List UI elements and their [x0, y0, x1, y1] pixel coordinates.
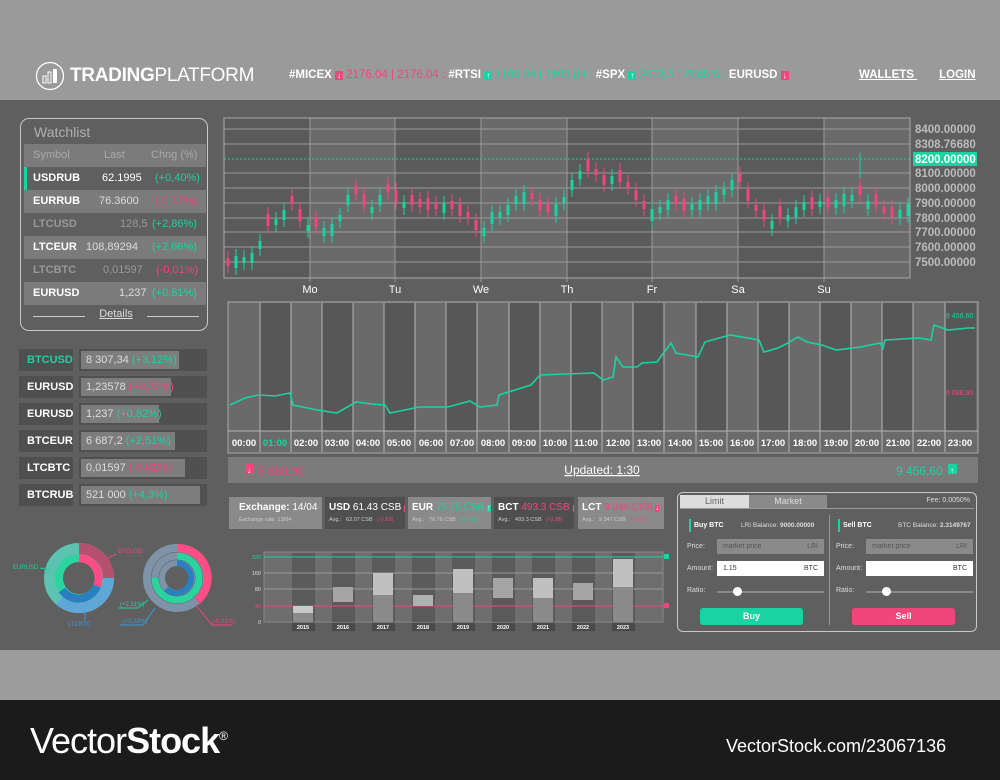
BCT box: [494, 497, 574, 529]
summary bar: 9 456,60: [896, 464, 943, 478]
donut left: BTCUSD: [118, 549, 143, 555]
row EURUSD: EURUSD: [33, 287, 79, 299]
row LTCEUR: (+2,66%): [152, 241, 197, 253]
hour labels: 22:00: [917, 438, 941, 449]
sell column: Ratio:: [836, 587, 854, 594]
candlestick chart: [224, 118, 977, 296]
row LTCUSD: LTCUSD: [33, 218, 77, 230]
ticker EURUSD: 1,23578 (+0,32%): [86, 381, 174, 393]
day labels: Mo: [302, 284, 318, 296]
panel: order form: Market: [774, 496, 802, 506]
price axis: 8308.76680: [915, 139, 976, 151]
row EURUSD: [24, 282, 206, 305]
hour labels: 03:00: [325, 438, 349, 449]
hour labels: 17:00: [761, 438, 785, 449]
sell column: Sell BTC: [843, 522, 872, 529]
ticker BTCUSD: [19, 349, 207, 371]
ticker BTCUSD: 8 307,34 (+3,12%): [86, 354, 177, 366]
watermark bar: VectorStock.com/23067136: [726, 736, 946, 756]
day labels: We: [473, 284, 489, 296]
day labels: Sa: [731, 284, 746, 296]
sell column: market price: [872, 543, 911, 550]
bar chart: 2017: [377, 625, 389, 631]
ticker BTCEUR: 6 687,2 (+2,51%): [86, 435, 171, 447]
row EURUSD: (+0,81%): [152, 287, 197, 299]
row LTCEUR: 108,89294: [86, 241, 138, 253]
candles: [228, 152, 908, 275]
ticker BTCUSD: BTCUSD: [27, 354, 73, 366]
hour labels: 23:00: [948, 438, 972, 449]
day labels: Fr: [647, 284, 658, 296]
bar chart: 2023: [617, 625, 629, 631]
tabs: Limit: [705, 496, 724, 506]
sell column: Price:: [836, 543, 854, 550]
bar chart: 2022: [577, 625, 589, 631]
hour labels: 20:00: [855, 438, 879, 449]
price axis: 7800.00000: [915, 213, 976, 225]
buy column: Buy: [743, 611, 760, 621]
bar chart: 160: [252, 571, 261, 577]
ticker LTCBTC: 0,01597 (-0,01%): [86, 462, 171, 474]
exchange date box: Exchange rate: 13/04: [239, 517, 291, 523]
price axis: 7700.00000: [915, 227, 976, 239]
ticker list: [19, 349, 207, 506]
price axis: 8100.00000: [915, 168, 976, 180]
sell column: Amount:: [836, 565, 862, 572]
day labels: Th: [561, 284, 573, 296]
panel: order form: Fee: 0.0050%: [926, 497, 970, 504]
EUR box: EUR 75.75 CSB ↑: [412, 502, 491, 513]
hour labels: 06:00: [419, 438, 443, 449]
row LTCUSD: (+2,86%): [152, 218, 197, 230]
row LTCUSD: 128,5: [120, 218, 148, 230]
summary bar: ↑: [950, 466, 954, 475]
row LTCBTC: 0,01597: [103, 264, 143, 276]
tabs: [680, 495, 749, 508]
summary bar: ↓: [247, 466, 251, 475]
buy column: 1.15: [723, 565, 737, 572]
bars: [293, 559, 633, 622]
donut left: [13, 549, 143, 628]
buy column: LRI: [807, 543, 818, 550]
watchlist header row: Chng (%): [151, 149, 197, 161]
bar chart: 2020: [497, 625, 509, 631]
buy column: Buy BTC: [694, 522, 724, 529]
sell column: [836, 519, 973, 625]
watermark bar: [0, 700, 1000, 780]
row EURRUB: EURRUB: [33, 195, 80, 207]
watermark bar: VectorStock®: [30, 720, 227, 761]
row USDRUB: (+0,40%): [155, 172, 200, 184]
bar chart: 80: [255, 587, 261, 593]
ticker LTCBTC: LTCBTC: [27, 462, 70, 474]
hour labels: 10:00: [543, 438, 567, 449]
hour labels: 00:00: [232, 438, 256, 449]
header bar: [0, 0, 1000, 100]
line chart: 6 688,90: [946, 390, 973, 397]
BCT box: BCT 493.3 CSB ↓: [498, 502, 574, 513]
USD box: Avg.: 62.07 CSB (-0.63): [329, 517, 393, 523]
line chart: 9 456,60: [946, 313, 973, 320]
watchlist header row: Last: [104, 149, 125, 161]
ticker EURUSD 2: EURUSD: [27, 408, 73, 420]
buy column: market price: [723, 543, 762, 550]
panel: order form: [677, 492, 977, 632]
ticker EURUSD 2: 1,237 (+0,82%): [86, 408, 162, 420]
hour labels: 15:00: [699, 438, 723, 449]
brand text: TRADINGPLATFORM: [70, 65, 254, 86]
bar chart: 0: [258, 620, 261, 626]
bar chart: 2019: [457, 625, 469, 631]
bar chart: [252, 552, 669, 631]
ticker tape: #MICEX ↓ 2176.04 | 2176.04 : #RTSI ↑ 1105.84 | 1105.84 : #SPX ↑ 2665.5 | 2665.5 : EURUSD ↓: [289, 69, 787, 81]
buy column: BTC: [804, 565, 818, 572]
watchlist header row: Symbol: [33, 149, 70, 161]
donut right: (+2.51%): [120, 602, 145, 608]
LCT box: Avg.: 9.347 CSB (-0.17): [582, 517, 646, 523]
buy column: Price:: [687, 543, 705, 550]
USD box: [325, 497, 405, 529]
donut left: EURUSD: [13, 565, 39, 571]
ticker BTCRUB: [19, 484, 207, 506]
row EURRUB: [24, 190, 206, 213]
row LTCUSD: [33, 218, 197, 230]
ticker BTCRUB: BTCRUB: [27, 489, 73, 501]
hour labels: [232, 438, 972, 449]
day labels: [302, 284, 831, 296]
EUR box: Avg.: 76.76 CSB (+1.01): [412, 517, 478, 523]
price axis: [913, 124, 977, 269]
row EURRUB: 76.3600: [99, 195, 139, 207]
bar chart: 2015: [297, 625, 309, 631]
hour labels: 02:00: [294, 438, 318, 449]
watchlist title: Watchlist: [34, 124, 90, 140]
ticker LTCBTC: [19, 457, 207, 479]
sell column: LRI: [956, 543, 967, 550]
price axis: 8200.00000: [915, 154, 976, 166]
summary bar: [228, 457, 978, 483]
donut right: (-0.01%): [212, 619, 235, 625]
bar chart: 2021: [537, 625, 549, 631]
hour labels: 16:00: [730, 438, 754, 449]
day labels: Tu: [389, 284, 401, 296]
hour labels: 09:00: [512, 438, 536, 449]
icon: logo circle: [36, 62, 64, 90]
bar chart: 2018: [417, 625, 429, 631]
day labels: Su: [817, 284, 831, 296]
bar chart: 320: [252, 555, 261, 561]
donut right: [118, 548, 235, 625]
bar chart: 40: [255, 604, 261, 610]
ticker EURUSD: [19, 376, 207, 398]
row USDRUB: [24, 167, 206, 190]
row USDRUB: USDRUB: [33, 172, 80, 184]
exchange date box: [229, 497, 322, 529]
summary bar: Updated: 1:30: [564, 463, 640, 477]
buy column: Ratio:: [687, 587, 705, 594]
buy column: LRI Balance: 9000.00000: [741, 522, 814, 529]
row LTCBTC: (-0,01%): [156, 264, 198, 276]
summary bar: 6 688,90: [258, 464, 305, 478]
ticker EURUSD: EURUSD: [27, 381, 73, 393]
hour labels: 07:00: [450, 438, 474, 449]
price axis: 8000.00000: [915, 183, 976, 195]
row EURUSD: 1,237: [119, 287, 147, 299]
donut right: (+0.32%): [123, 619, 148, 625]
row LTCBTC: LTCBTC: [33, 264, 76, 276]
ticker BTCEUR: BTCEUR: [27, 435, 73, 447]
sell column: BTC: [953, 565, 967, 572]
price axis: 7900.00000: [915, 198, 976, 210]
buy column: Amount:: [687, 565, 713, 572]
row EURRUB: (-0,17%): [155, 195, 197, 207]
hour labels: 05:00: [387, 438, 411, 449]
watchlist header row: [24, 144, 206, 167]
nav links: WALLETS LOGIN: [859, 69, 976, 81]
row USDRUB: 62.1995: [102, 172, 142, 184]
ticker EURUSD 2: [19, 403, 207, 425]
hour labels: 19:00: [824, 438, 848, 449]
hour labels: 14:00: [668, 438, 692, 449]
hour labels: 12:00: [606, 438, 630, 449]
exchange date box: Exchange: 14/04: [239, 502, 317, 513]
hour labels: 04:00: [356, 438, 380, 449]
hour labels: 21:00: [886, 438, 910, 449]
donut charts: [13, 543, 235, 628]
hour labels: 08:00: [481, 438, 505, 449]
hour labels: 11:00: [574, 438, 598, 449]
ticker BTCRUB: 521 000 (+4,3%): [86, 489, 168, 501]
price axis: 7600.00000: [915, 242, 976, 254]
hour labels: 18:00: [793, 438, 817, 449]
BCT box: Avg.: 493.3 CSB (-0.38): [498, 517, 562, 523]
row LTCBTC: [33, 264, 198, 276]
hour labels: 01:00: [263, 438, 287, 449]
donut left: LTCBTC: [68, 622, 92, 628]
panel: watchlist: [20, 118, 208, 331]
bar chart: 2016: [337, 625, 349, 631]
EUR box: [408, 497, 491, 529]
buy column: [687, 519, 824, 625]
details link: Details: [99, 308, 133, 320]
price line: [230, 325, 975, 413]
LCT box: LCT 9.246 CSB ↓: [582, 502, 659, 513]
exchange row: [229, 497, 664, 529]
row LTCEUR: [24, 236, 206, 259]
hour labels: 13:00: [637, 438, 661, 449]
sell column: BTC Balance: 2.3149767: [898, 522, 971, 529]
row LTCEUR: LTCEUR: [33, 241, 77, 253]
ticker BTCEUR: [19, 430, 207, 452]
price axis: 7500.00000: [915, 257, 976, 269]
footer band: [0, 650, 1000, 700]
sell column: Sell: [895, 611, 912, 621]
price axis: 8400.00000: [915, 124, 976, 136]
logo: [36, 62, 254, 90]
line chart: [228, 302, 978, 483]
LCT box: [578, 497, 664, 529]
